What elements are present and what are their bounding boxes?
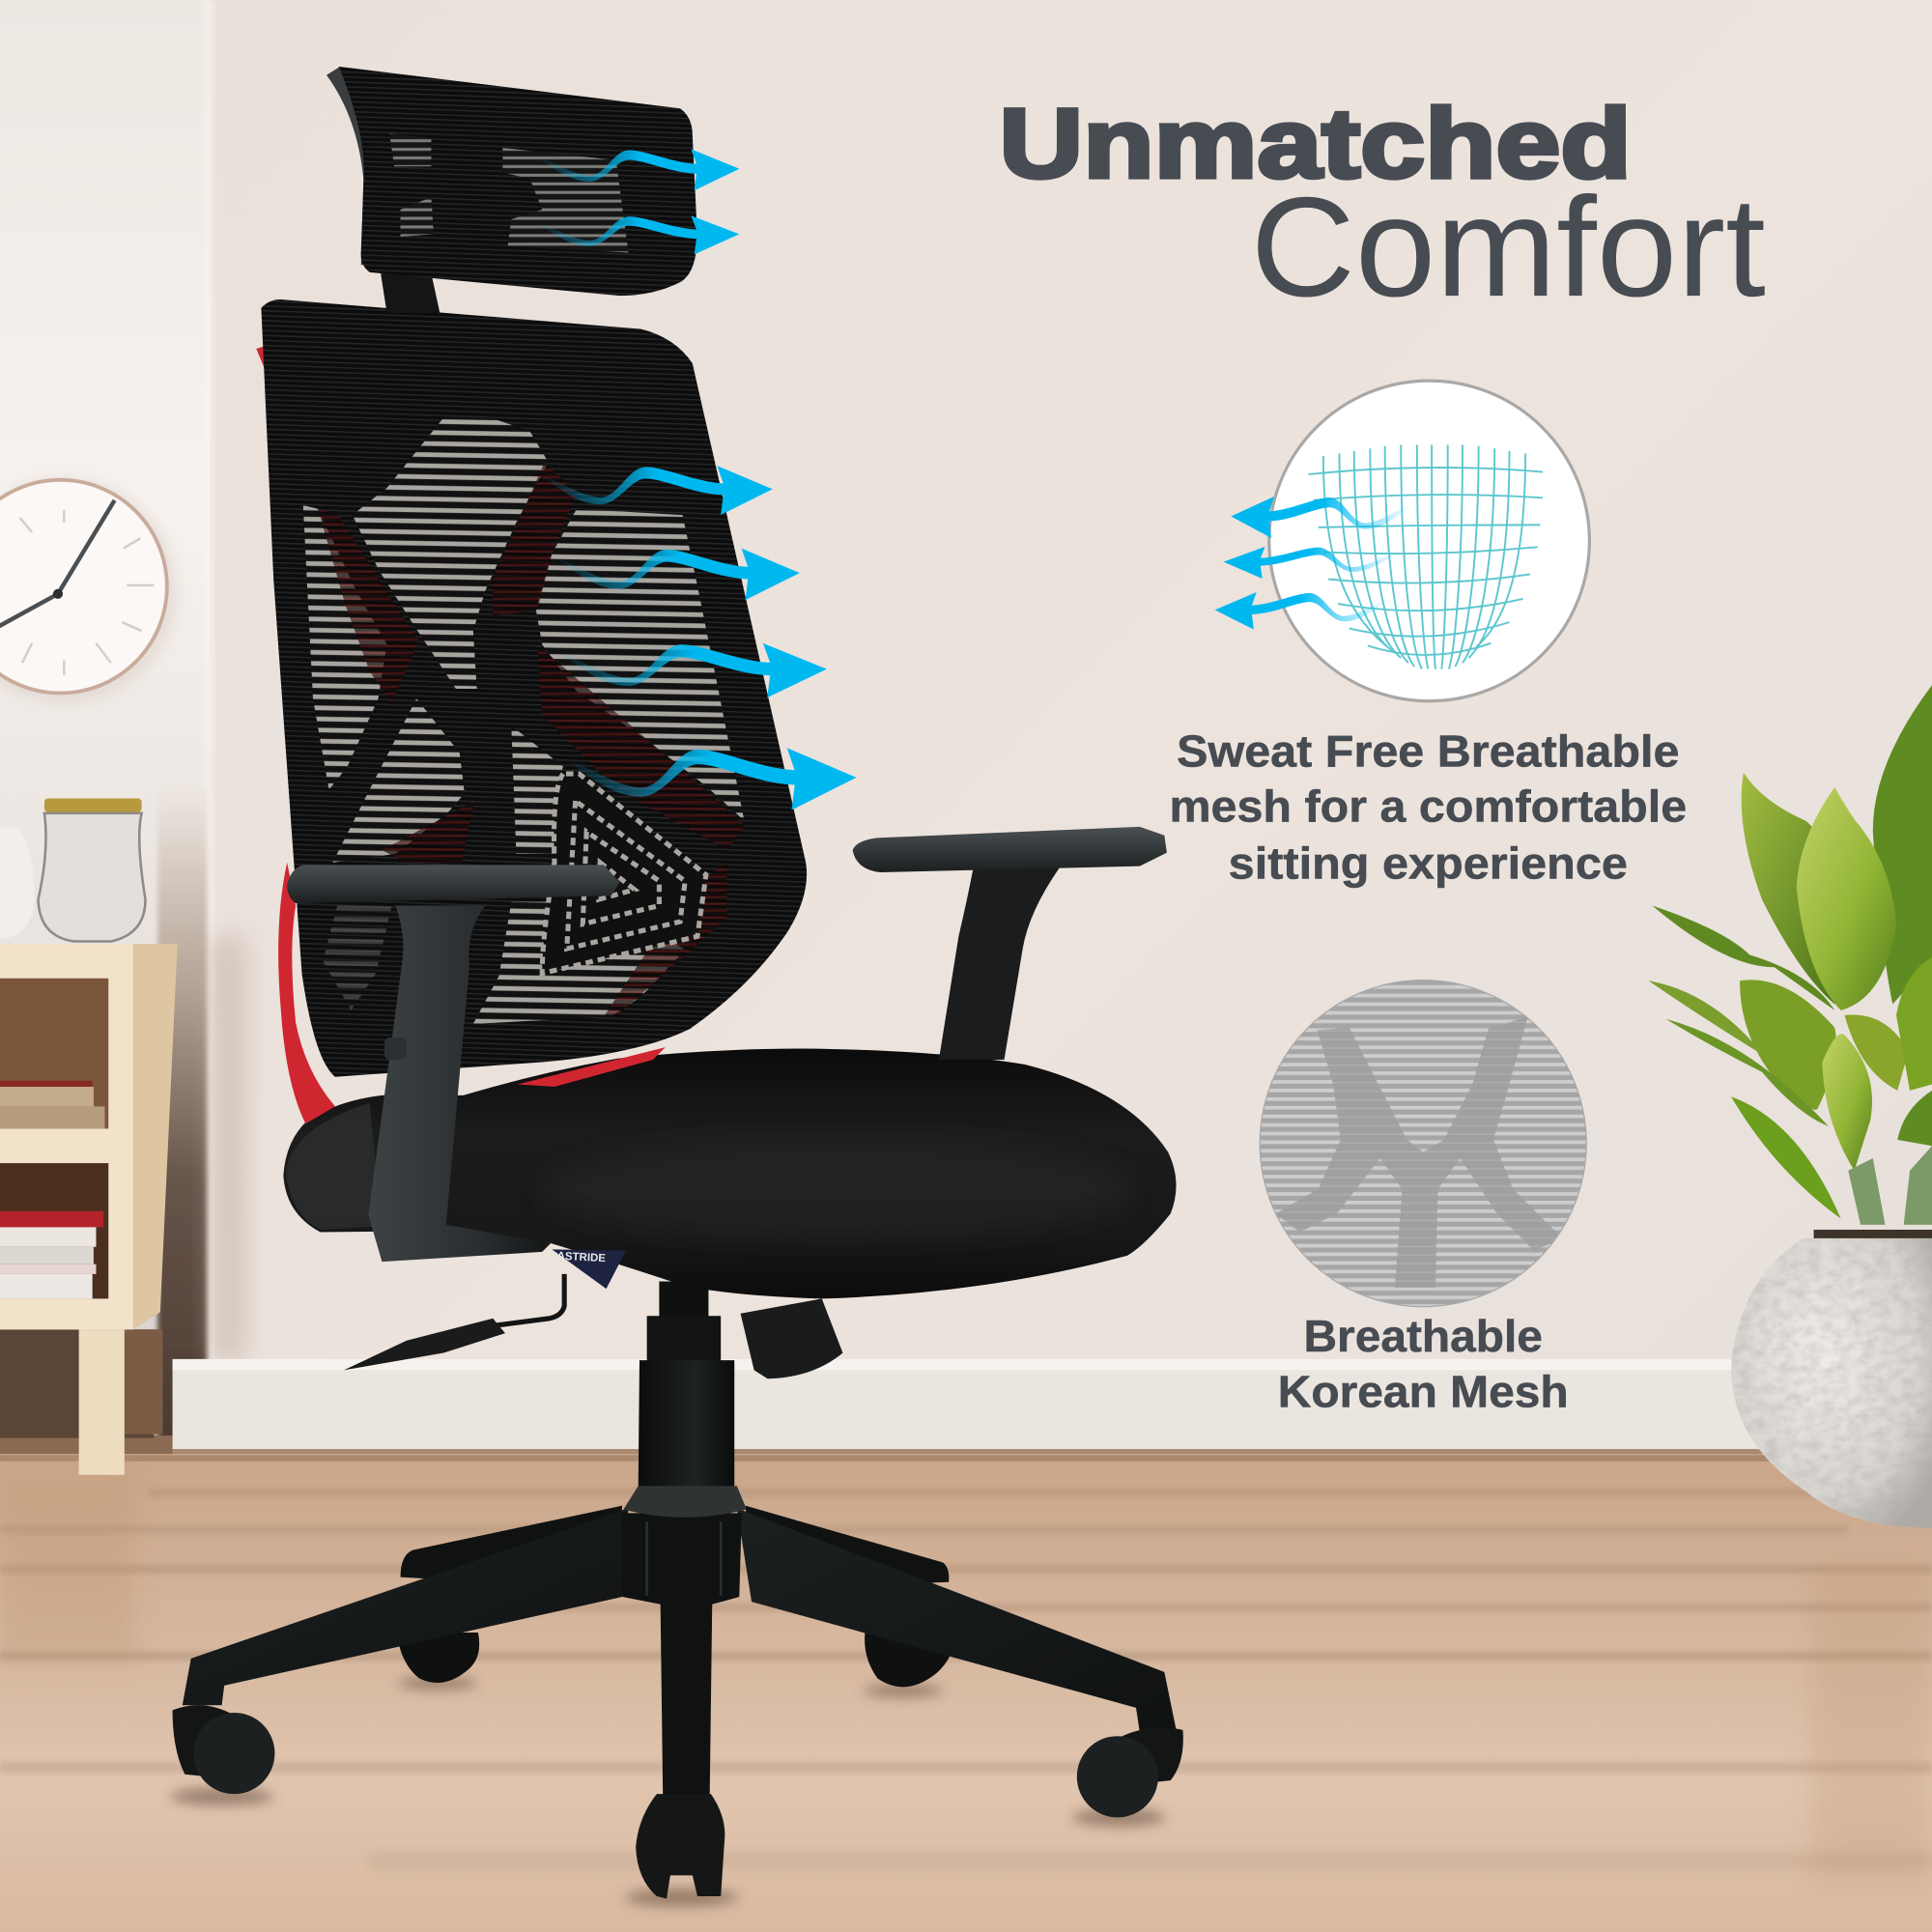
title (999, 89, 1766, 327)
mesh openings (303, 417, 744, 1024)
front left caster (173, 1705, 274, 1794)
near armrest (287, 865, 620, 1262)
icon: breathable mesh circle (1215, 381, 1589, 701)
red frame (256, 345, 666, 1123)
hub ridges (647, 1521, 721, 1596)
seat cushion (283, 1048, 1177, 1298)
front caster (636, 1794, 724, 1899)
plant pot (1731, 1238, 1932, 1528)
icon: korean mesh circle (1257, 974, 1589, 1319)
wall clock (0, 478, 178, 705)
leaves (1649, 685, 1932, 1225)
outflow arrows (1215, 497, 1408, 630)
text: sweat free mesh: Sweat Free Breathable (1177, 725, 1680, 776)
title: Comfort (1251, 168, 1766, 327)
far armrest (853, 827, 1167, 1060)
arm pad (287, 865, 620, 903)
front base leg (622, 1513, 742, 1797)
front right caster (1077, 1728, 1183, 1817)
seat label tag: ASTRIDE (556, 1251, 607, 1264)
back base legs (401, 1506, 949, 1589)
headrest mesh openings (389, 133, 629, 252)
mesh grid (1309, 444, 1543, 669)
arm post (368, 906, 551, 1262)
tilt knob (741, 1298, 842, 1378)
mesh backrest (261, 299, 807, 1077)
gas lift pole (623, 1282, 747, 1518)
text: sweat free mesh (1169, 725, 1687, 888)
mesh x shape (1275, 1016, 1562, 1288)
title: Unmatched (999, 89, 1632, 199)
red frame seen through mesh (318, 462, 746, 1016)
potted plant (1649, 685, 1932, 1528)
floor shadows (170, 1677, 1166, 1906)
right base leg (737, 1508, 1177, 1732)
office chair (170, 67, 1183, 1906)
back casters (397, 1633, 955, 1687)
shelf with glass jar and books (0, 799, 178, 1475)
text: sweat free mesh: sitting experience (1229, 838, 1628, 888)
text: korean mesh: Korean Mesh (1278, 1367, 1569, 1417)
tilt lever (344, 1274, 564, 1370)
headrest neck (381, 273, 440, 313)
left base leg (183, 1508, 629, 1705)
wooden floor (0, 1435, 1932, 1932)
text: korean mesh (1278, 1311, 1569, 1417)
arm knob (384, 1037, 407, 1060)
text: sweat free mesh: mesh for a comfortable (1169, 781, 1687, 832)
text: korean mesh: Breathable (1303, 1311, 1543, 1361)
airflow arrows on backrest (545, 466, 856, 810)
seat label tag (552, 1249, 626, 1289)
baseboard (173, 1359, 1775, 1457)
lumbar swirl pattern (542, 774, 706, 974)
airflow arrows on headrest (541, 149, 739, 254)
headrest (327, 67, 697, 296)
